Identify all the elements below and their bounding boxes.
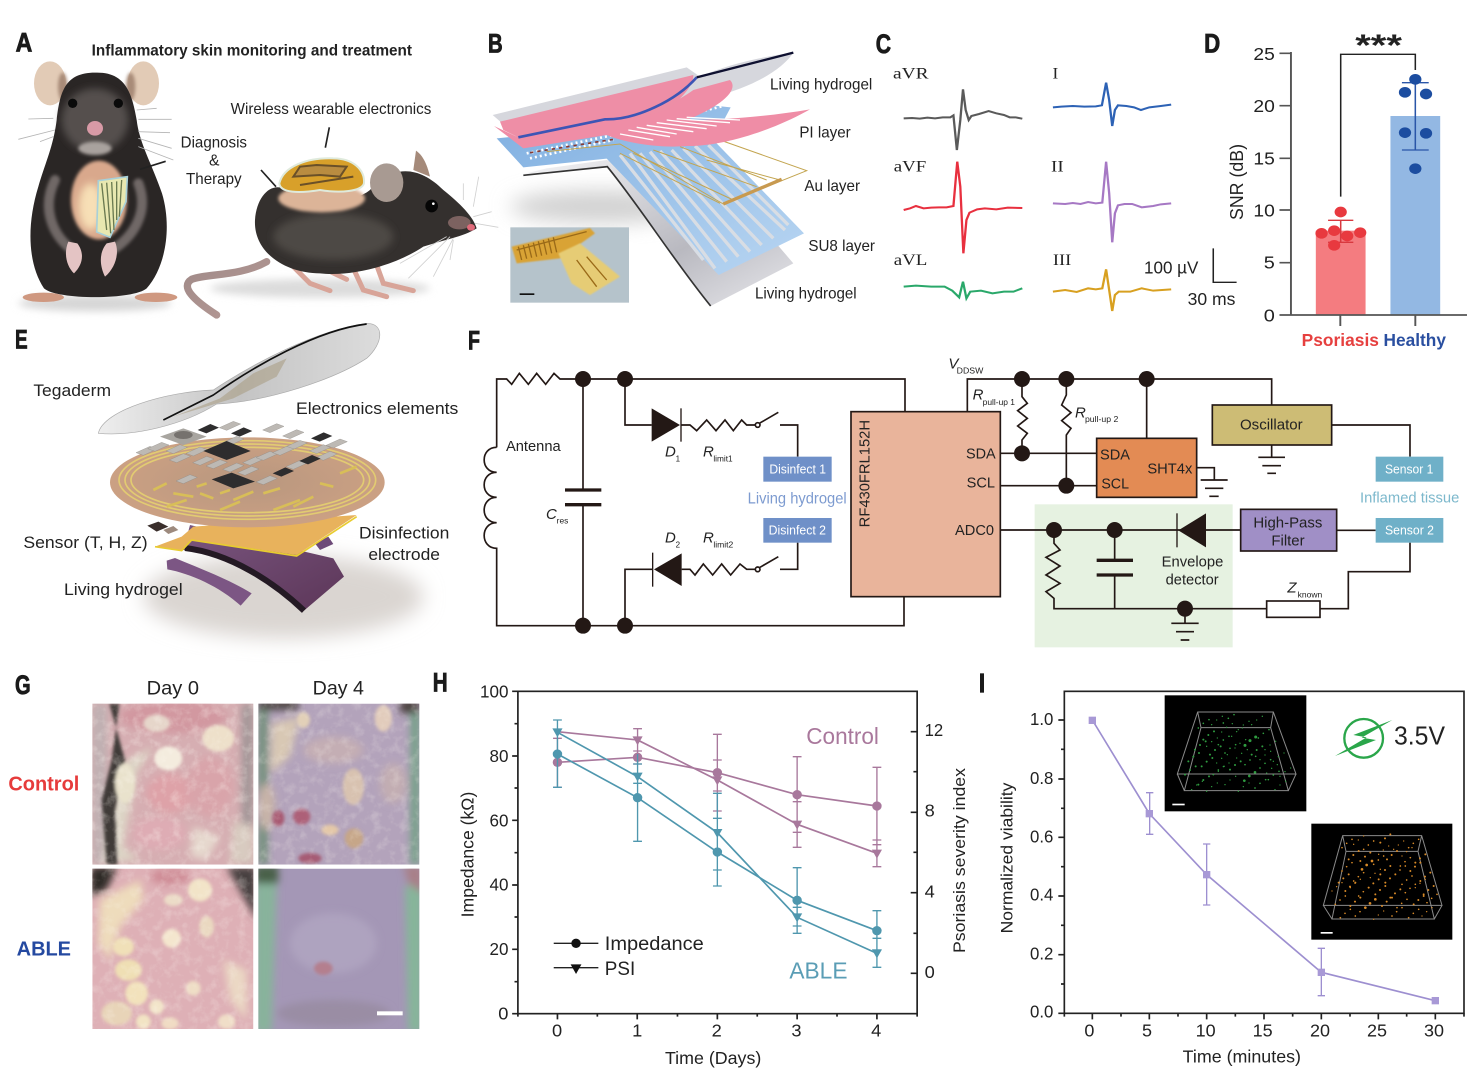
lead labels: III [1053,251,1072,269]
right axis labels: 0 [925,962,935,982]
circuit labels left: 1 [676,455,681,464]
chip pin and resistor labels [955,386,1223,588]
y-axis labels: 0.8 [1030,768,1053,788]
panel letter A: A [16,28,32,58]
chip pin and resistor labels: R [1075,404,1086,421]
chip pin and resistor labels: R [973,386,984,403]
circuit labels left: Antenna [506,438,561,455]
error bars [1328,220,1353,242]
diode D1 [652,408,682,442]
tick labels [1253,44,1275,325]
column heading: day 4: Day 4 [313,678,364,699]
left axis labels: 100 [480,681,508,701]
shadow [510,190,690,223]
x-axis labels: 30 [1424,1021,1444,1041]
right y-axis title: Psoriasis severity index [951,768,969,953]
labels: Living hydrogel [770,76,872,93]
x-axis labels [1084,1021,1444,1041]
mouse: side view with device [187,151,498,315]
sensor 1 [1376,457,1443,482]
sensors [147,522,178,534]
right part of circuit [955,371,1459,647]
left axis labels: 60 [489,810,508,830]
legend: Impedance [605,933,704,955]
tick labels: 0 [1264,306,1275,325]
lead labels: aVF [894,158,926,175]
lower living hydrogel [523,160,793,306]
panel letter D: D [1204,29,1220,59]
hydrogel dark edge [185,548,304,611]
label: diagnosis and therapy: & [209,153,220,170]
nodes [575,371,633,634]
chip pin and resistor labels: Envelope [1162,554,1223,571]
icon: voltage bolt [1335,719,1392,758]
panel letter F: F [468,325,480,355]
panel letter G: G [15,670,31,700]
oscillator box: Oscillator [1240,416,1303,433]
tick labels: 25 [1253,44,1275,64]
y-axis labels: 0.0 [1030,1002,1053,1022]
y-axis labels: 0.6 [1030,826,1053,846]
disinfect 1 electrode [763,457,832,482]
panel G: skin photographs [8,670,423,1032]
RF chip [851,412,1000,597]
circuit labels left: limit2 [713,540,734,549]
legend [554,933,704,980]
chip pin and resistor labels: pull-up 1 [983,398,1016,407]
labels [755,76,875,302]
diode D2 [652,553,682,587]
data points: healthy [1399,74,1432,174]
row label: control: Control [8,774,79,796]
data points: psoriasis [1315,207,1366,251]
circuit labels left: 2 [676,540,681,549]
capacitor [565,490,601,505]
panel E: exploded device [15,323,458,638]
oscillator box [1212,405,1332,445]
nodes [1014,371,1193,617]
lead labels: aVL [894,251,927,269]
series label: control: Control [806,723,879,749]
viability line [1089,717,1439,1004]
scale bar: 30 ms [1188,289,1235,309]
trace: III [1053,269,1171,311]
RF chip: RF430FRL152H [856,420,873,527]
high-pass filter box [1241,509,1337,551]
photo: ABLE day 0 [90,867,257,1029]
black hydrogel edge [697,53,793,77]
x-axis title: Time (minutes) [1183,1047,1301,1067]
significance stars: *** [1355,27,1402,62]
label: living hydrogel: Living hydrogel [748,490,847,507]
title: Inflammatory skin monitoring and treatment [92,43,412,60]
series label: ABLE: ABLE [789,957,848,983]
tick labels: 5 [1264,253,1275,272]
chip pin and resistor labels: ADC0 [955,522,994,539]
PCB disc [110,437,385,527]
left axis labels: 20 [489,939,508,959]
y-axis title: SNR (dB) [1226,144,1247,220]
disinfect 1 electrode: Disinfect 1 [769,462,826,476]
blue hydrogel edge [518,77,697,137]
x-axis labels: 25 [1367,1021,1387,1041]
left axis labels: 0 [498,1003,508,1023]
circuit labels left: res [557,516,568,525]
trace: aVR [904,89,1022,150]
hydrogel edge [523,167,711,306]
y-axis labels: 1.0 [1030,709,1053,729]
circuit labels left: D [665,529,676,546]
panel A: skin monitoring mice [16,28,498,315]
SHT4x sensor box: SDA [1100,446,1130,463]
small hydrogel piece [315,537,333,550]
label: diagnosis and therapy: Diagnosis [181,134,247,151]
right axis labels: 4 [925,881,935,901]
panel letter B: B [488,29,503,59]
labels: Au layer [804,178,860,195]
x-axis labels: 15 [1253,1021,1273,1041]
bottom axis labels [552,1021,881,1041]
left axis labels: 40 [489,874,508,894]
circuit labels left: limit1 [713,454,733,463]
known impedance: known [1298,590,1322,599]
SHT4x sensor box: SCL [1101,475,1129,492]
trace: I [1053,83,1171,126]
supply label: V [948,355,960,372]
bottom axis labels: 0 [552,1021,562,1041]
panel D: SNR bar chart [1204,27,1467,350]
ABLE series [552,720,882,967]
y-axis labels: 0.4 [1030,885,1053,905]
tick labels: 15 [1253,149,1275,168]
column heading: day 0: Day 0 [147,678,199,699]
disinfection electrode [155,515,357,556]
significance bracket [1341,54,1415,197]
inset: dead cells [1311,824,1452,940]
circuit labels left: D [665,444,676,461]
panel letter H: H [433,668,448,698]
label: diagnosis and therapy: Therapy [186,171,242,188]
right axis labels: 8 [925,801,935,821]
panel letter C: C [876,30,891,60]
left axis labels [480,681,508,1023]
sensor 2 [1376,518,1443,543]
Au layer [547,140,807,204]
bottom axis labels: 4 [871,1021,881,1041]
supply label [948,355,984,375]
chip pin and resistor labels: detector [1166,571,1219,588]
label: 3.5V: 3.5V [1394,721,1446,751]
photo: control day 4 [258,700,419,865]
right axis labels [925,720,943,982]
error bars [1402,83,1429,150]
labels: Tegaderm [33,382,111,400]
trace: II [1053,162,1171,242]
diode [1176,513,1206,547]
label: wireless wearable electronics: Wireless wearable electronics [231,101,431,118]
x-axis labels: 5 [1142,1021,1152,1041]
labels: Living hydrogel [755,285,857,302]
high-pass filter box: High-Pass [1253,515,1322,532]
wires: antenna and disinfection loop [484,373,905,626]
control series [553,729,882,867]
chip pin and resistor labels: SDA [966,445,996,462]
labels: Living hydrogel [64,581,183,599]
panel F: circuit diagram [468,325,1459,647]
bottom axis labels: 1 [632,1021,642,1041]
supply label: DDSW [957,366,984,375]
y-axis title: Normalized viability [997,782,1016,933]
category label: psoriasis: Psoriasis [1302,330,1379,350]
scale bar [377,1011,403,1015]
electronic components [136,421,347,488]
disinfect 2 electrode: Disinfect 2 [769,524,826,538]
scale bar [1144,248,1237,309]
x-axis labels: 10 [1196,1021,1216,1041]
shadow [143,555,423,638]
category label: healthy: Healthy [1384,330,1446,350]
lead labels: aVR [893,65,929,82]
wires: sensing [967,379,1410,623]
x-axis labels: 20 [1310,1021,1330,1041]
labels: SU8 layer [808,238,875,255]
label: inflamed tissue: Inflamed tissue [1360,489,1459,506]
y-axis labels: 0.2 [1030,943,1053,963]
labels: PI layer [799,125,851,142]
sensor 2: Sensor 2 [1385,524,1434,538]
capacitor [1097,560,1133,575]
panel B: device layers [488,29,875,306]
bar: healthy [1390,116,1440,315]
labels [23,382,458,599]
high-pass filter box: Filter [1271,533,1305,550]
inset photo [510,227,629,303]
SU8 layer [497,103,804,275]
bar: psoriasis [1316,231,1366,315]
legend: PSI [605,958,635,980]
tegaderm film [98,323,380,434]
bottom axis labels: 3 [791,1021,802,1041]
label: diagnosis and therapy [181,134,247,188]
axes [1279,52,1467,326]
labels: Disinfection [359,525,449,543]
panel H: impedance and PSI chart [433,668,969,1068]
tick labels: 10 [1253,201,1275,220]
SHT4x sensor box [1097,438,1197,497]
labels: Sensor (T, H, Z) [23,534,148,552]
scale bar: 100 µV [1144,258,1199,277]
top living hydrogel [493,53,793,137]
mouse: front view [18,61,177,311]
circuit labels left: R [703,529,714,546]
ground symbols [1171,457,1285,640]
labels: Electronics elements [296,400,458,418]
right axis labels: 12 [925,720,943,740]
panel C: ECG traces [876,30,1237,311]
envelope detector background [1035,504,1233,647]
axes frame and ticks [512,691,917,1019]
disinfect 2 electrode [763,518,832,543]
PI layer [494,75,810,148]
trace: aVF [904,162,1022,253]
lead labels: II [1051,158,1064,175]
bottom axis labels: 2 [712,1021,722,1041]
photo: ABLE day 4 [255,865,423,1032]
circuit labels left: C [546,506,557,523]
tick labels: 20 [1253,96,1275,116]
known impedance [1267,580,1322,617]
lead labels: I [1053,65,1059,82]
chip pin and resistor labels: SCL [967,475,995,492]
lead labels [893,65,1072,269]
circuit labels left [506,438,734,549]
SHT4x sensor box: SHT4x [1147,460,1193,477]
chip pin and resistor labels: pull-up 2 [1085,415,1119,424]
row label: ABLE: ABLE [17,939,71,961]
circuit labels left: R [703,444,714,461]
panel I: viability chart [980,673,1464,1067]
known impedance: Z [1286,580,1297,597]
x-axis labels: 0 [1084,1021,1094,1041]
photo: control day 0 [92,700,253,865]
trace: aVL [904,282,1022,298]
left y-axis title: Impedance (kΩ) [457,792,477,917]
x-axis title: Time (Days) [665,1048,761,1068]
sensor 1: Sensor 1 [1385,462,1433,476]
y-axis labels [1030,709,1053,1022]
panel letter E: E [15,324,28,354]
hydrogel strip [167,558,252,606]
inset: live cells [1165,695,1306,811]
labels: electrode [368,546,440,564]
leader lines [140,127,329,187]
hydrogel main [183,525,344,611]
panel letter I [980,673,984,693]
left axis labels: 80 [489,746,508,766]
axes frame and ticks [1058,691,1464,1019]
